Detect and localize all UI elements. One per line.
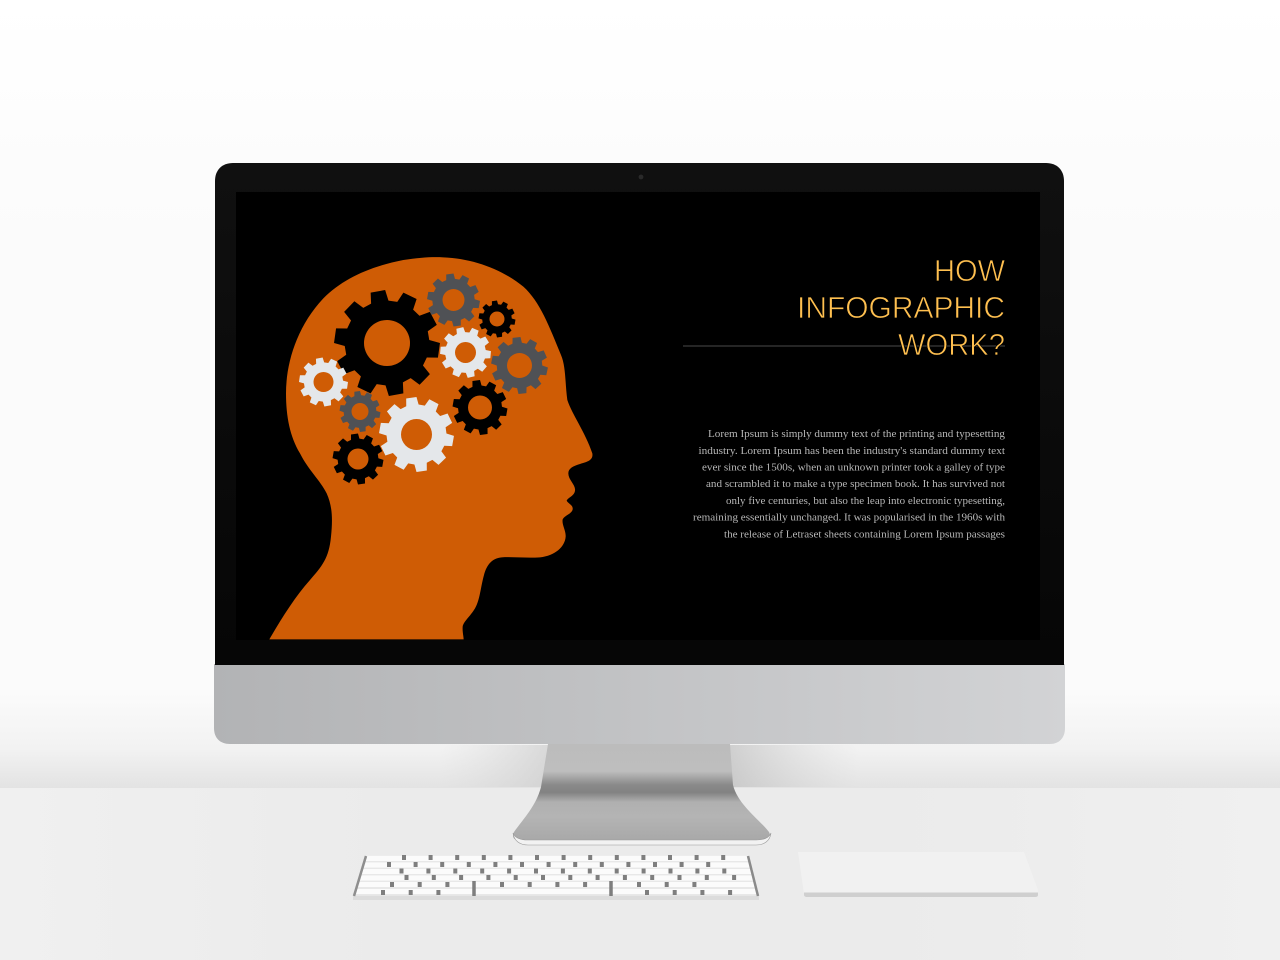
title: INFOGRAPHIC — [797, 290, 1005, 325]
keyboard — [353, 856, 759, 900]
body text: remaining essentially unchanged. It was popularised in the 1960s with — [693, 512, 1006, 524]
webcam — [639, 175, 643, 179]
screen — [236, 192, 1040, 640]
gear: large white — [374, 392, 459, 477]
body text — [693, 429, 1006, 540]
gear: gray right — [486, 332, 553, 399]
title — [797, 253, 1006, 362]
body text: and scrambled it to make a type specimen book. It has survived not — [706, 479, 1005, 490]
head silhouette with gears — [269, 257, 592, 639]
gear: large black — [328, 284, 446, 402]
monitor stand — [513, 744, 771, 845]
body text: industry. Lorem Ipsum has been the industry's standard dummy text — [698, 446, 1005, 457]
gear: small gray — [337, 388, 383, 435]
title: HOW — [934, 253, 1006, 288]
gear: black lower — [329, 430, 387, 488]
gear: small black top right — [476, 298, 518, 340]
desk surface — [0, 788, 1280, 960]
body text: Lorem Ipsum is simply dummy text of the printing and typesetting — [708, 429, 1006, 440]
trackpad — [798, 852, 1038, 897]
gear: white left — [296, 355, 351, 409]
title: WORK? — [898, 327, 1005, 362]
body text: the release of Letraset sheets containing Lorem Ipsum passages — [724, 530, 1005, 540]
monitor bezel — [215, 163, 1064, 665]
head silhouette — [269, 257, 592, 639]
body text: only five centuries, but also the leap into electronic typesetting, — [726, 496, 1005, 507]
gear: black right — [448, 376, 512, 439]
wall shadow left of stand — [440, 745, 548, 787]
title divider line — [683, 346, 1005, 347]
wall shadow right of stand — [730, 745, 860, 787]
body text: ever since the 1500s, when an unknown printer took a galley of type — [702, 462, 1005, 474]
gear: white middle — [438, 325, 493, 380]
gear: gray top — [423, 270, 484, 330]
monitor chin — [214, 664, 1065, 744]
